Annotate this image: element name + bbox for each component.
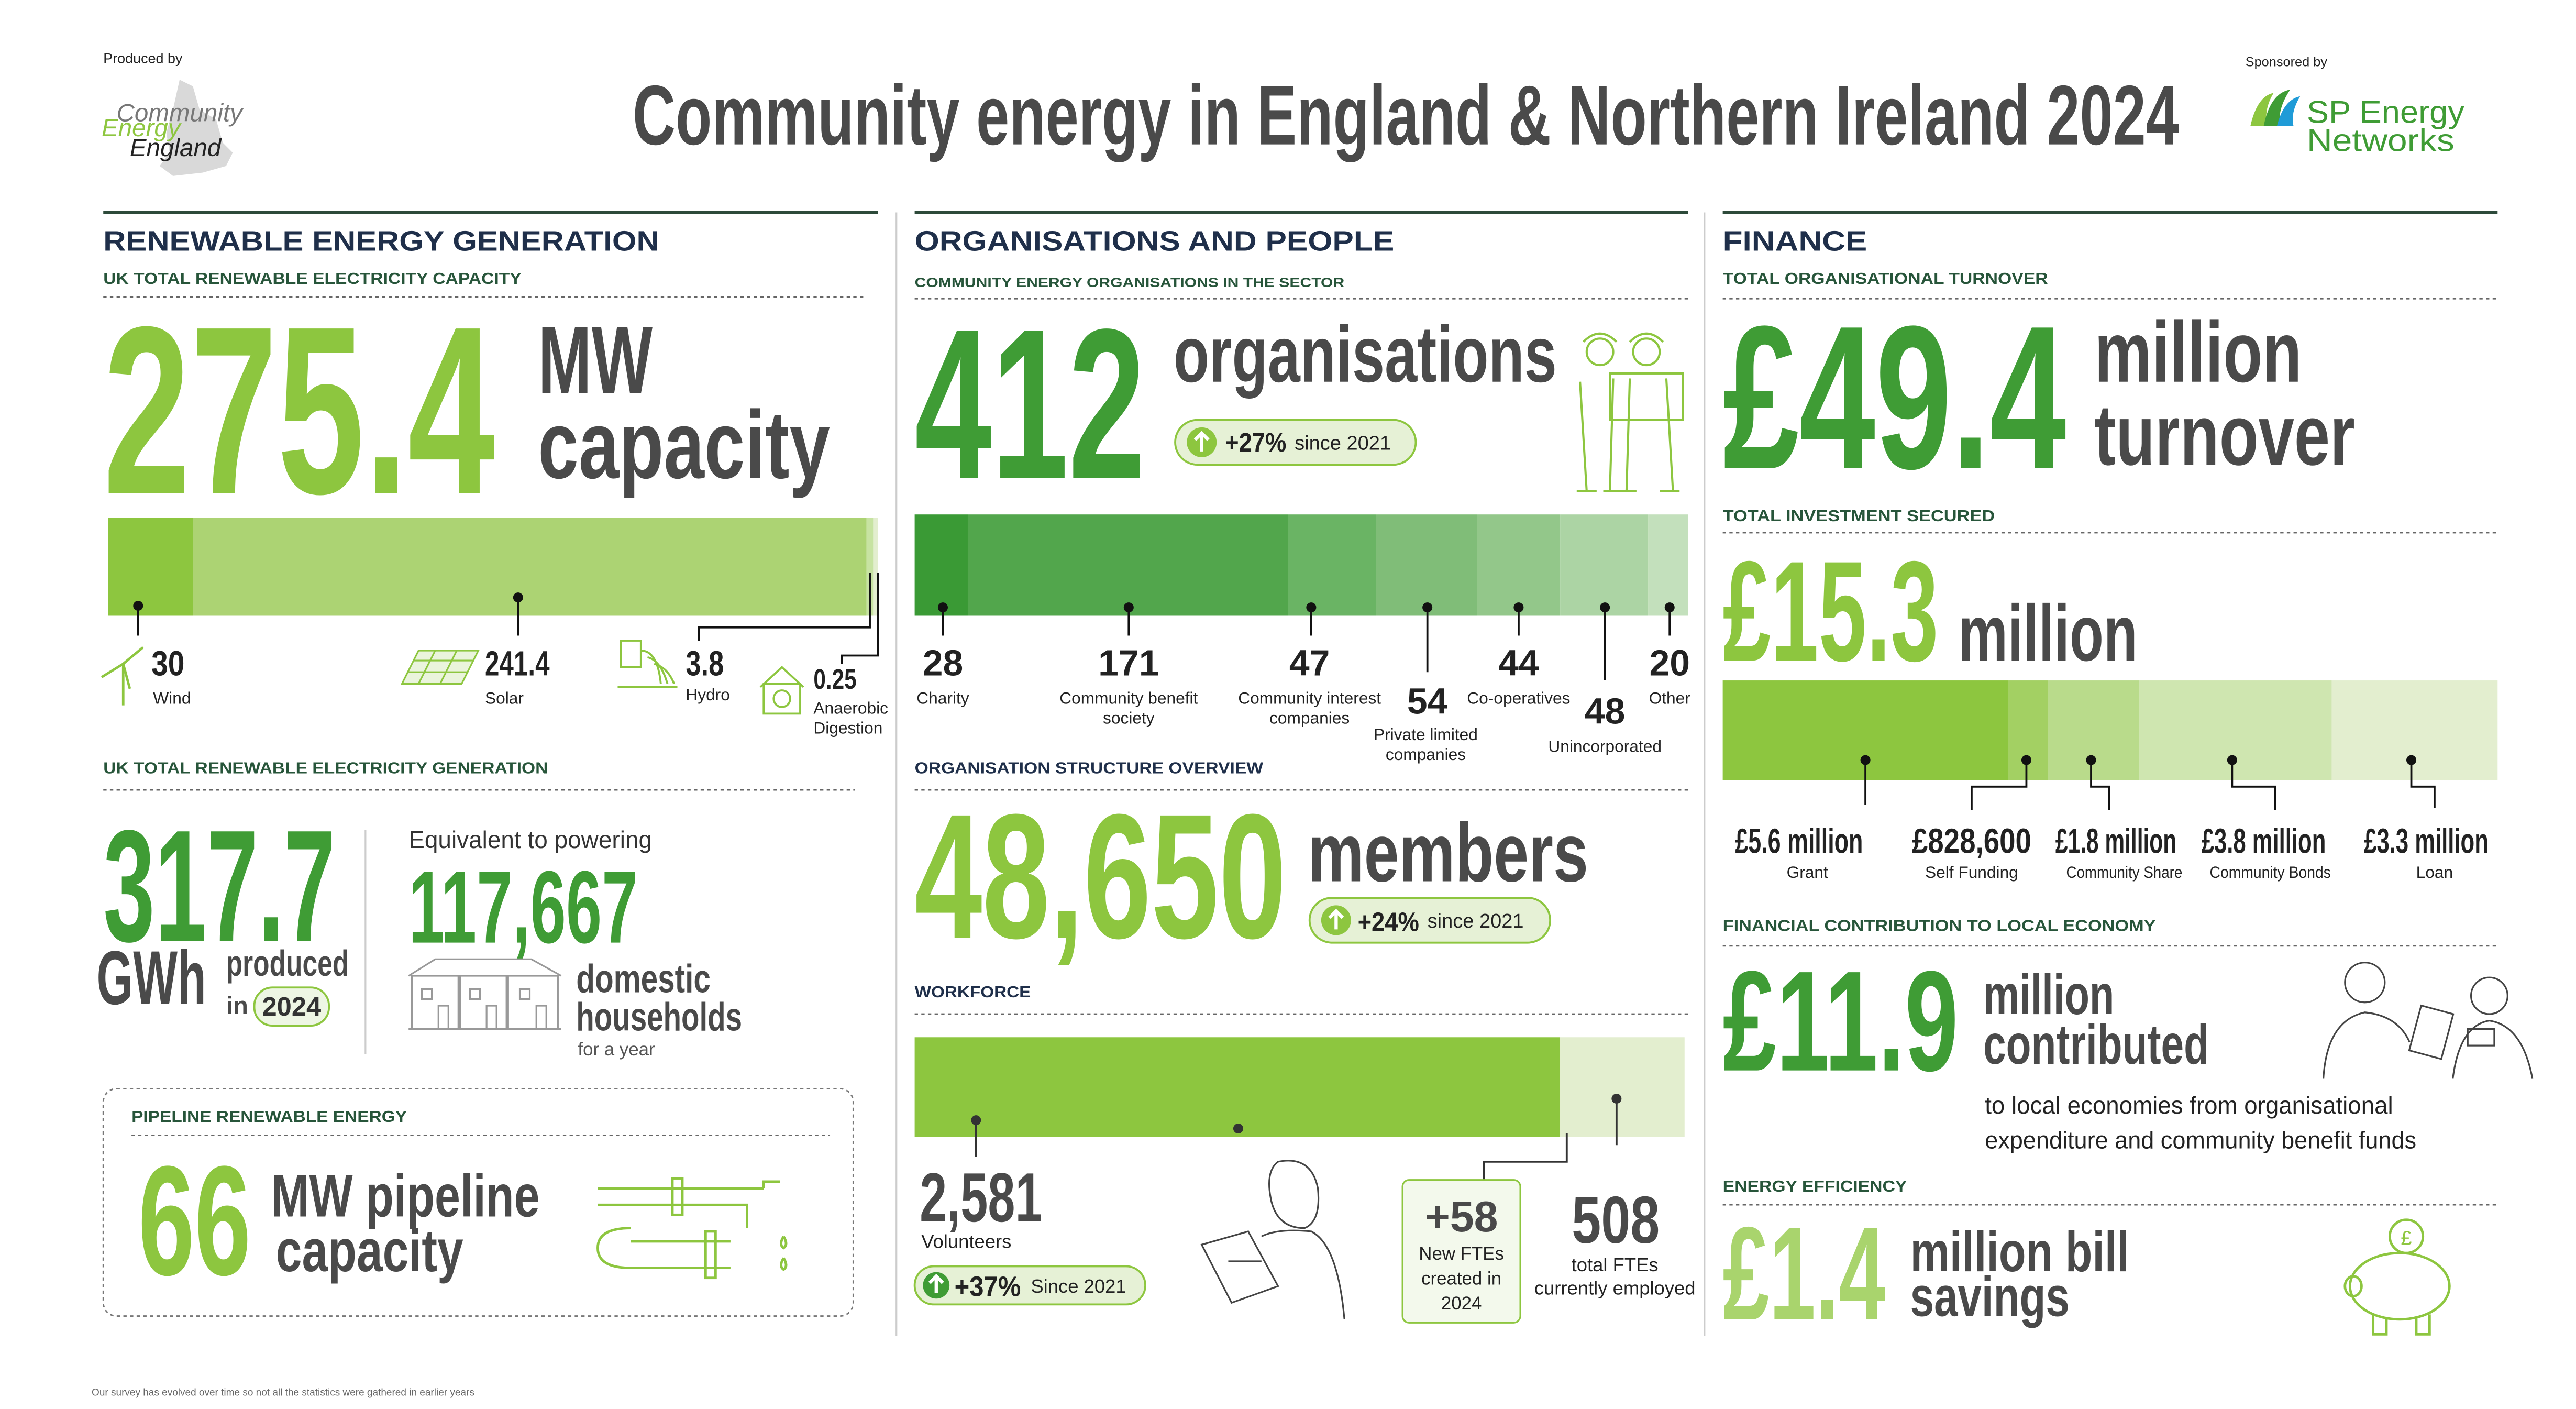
equivalent households (408, 826, 742, 1060)
produced by: Produced by (103, 50, 183, 66)
new FTEs box: New FTEs (1419, 1243, 1504, 1264)
org labels: 47 (1289, 643, 1330, 684)
subheading local economy: FINANCIAL CONTRIBUTION TO LOCAL ECONOMY (1723, 917, 2156, 934)
panel: organisations and people (915, 213, 1696, 1323)
icon: people with plan (1577, 334, 1683, 491)
panel: finance: TOTAL ORGANISATIONAL TURNOVER (1723, 270, 2048, 288)
equivalent households: 117,667 (408, 850, 637, 965)
panel: organisations and people: members (1308, 806, 1588, 899)
big number 317.7 GWh: produced (226, 943, 349, 984)
big number £49.4: £49.4 (1723, 283, 2067, 511)
org labels: Other (1649, 688, 1690, 707)
volunteers: 2,581 (920, 1159, 1043, 1237)
logo: Community Energy England: Energy (102, 114, 182, 142)
big number 317.7 GWh: GWh (97, 935, 206, 1020)
org labels: 28 (923, 643, 963, 684)
investment labels: Community Bonds (2210, 863, 2331, 882)
investment labels: Loan (2416, 863, 2453, 882)
capacity labels: 30 (151, 645, 184, 684)
org bar chart (915, 514, 1688, 680)
investment labels: Self Funding (1925, 863, 2018, 882)
capacity labels: 241.4 (485, 645, 550, 684)
new FTEs box: created in (1421, 1268, 1501, 1289)
logo: SP Energy Networks (2250, 90, 2464, 158)
capacity labels: Solar (485, 688, 524, 707)
icon: pipe and tap (598, 1179, 786, 1278)
panel: finance: million (2094, 304, 2302, 400)
new FTEs box: 2024 (1441, 1293, 1482, 1314)
volunteers (915, 1159, 1145, 1304)
MW capacity: capacity (538, 391, 830, 499)
org labels: 44 (1498, 643, 1539, 684)
panel: finance: savings (1910, 1265, 2070, 1328)
capacity labels: 0.25 (813, 664, 857, 695)
volunteers: Volunteers (921, 1231, 1011, 1252)
workforce bar (915, 1037, 1685, 1182)
icon: piggy bank (2345, 1220, 2449, 1334)
pill +24% (1310, 898, 1550, 943)
pill +27%: +27% (1225, 427, 1286, 457)
logo: SP Energy Networks: SP Energy (2307, 94, 2464, 129)
equivalent households: households (576, 995, 742, 1040)
panel: renewable energy generation (92, 213, 888, 1399)
logo: SP Energy Networks: Networks (2307, 123, 2455, 158)
panel: pipeline: capacity (276, 1218, 463, 1284)
big number 317.7 GWh: 2024 (262, 992, 321, 1021)
panel: finance: £11.9 (1723, 941, 1959, 1101)
capacity labels (151, 645, 888, 737)
capacity labels: 3.8 (686, 645, 724, 684)
equivalent households: for a year (578, 1039, 655, 1060)
panel: pipeline: 66 (138, 1133, 251, 1308)
icon: houses (408, 959, 561, 1029)
pill +27% (1175, 420, 1416, 465)
new FTEs box: +58 (1425, 1193, 1498, 1241)
icon: wind turbine (102, 647, 143, 706)
big number 317.7 GWh: 317.7 (103, 798, 336, 975)
investment bar chart (1723, 680, 2497, 810)
panel: finance: £15.3 (1723, 531, 1939, 691)
capacity labels: Digestion (813, 718, 882, 737)
org labels: Community interest (1238, 688, 1381, 707)
total FTEs: total FTEs (1572, 1254, 1659, 1275)
equivalent households: domestic (576, 957, 711, 1001)
panel: pipeline (103, 1088, 853, 1316)
big number 412: 412 (915, 284, 1145, 524)
subheading capacity: UK TOTAL RENEWABLE ELECTRICITY CAPACITY (103, 270, 522, 288)
org labels: Charity (916, 688, 969, 707)
subheading generation: UK TOTAL RENEWABLE ELECTRICITY GENERATION (103, 759, 548, 777)
panel: finance: million (1959, 589, 2138, 678)
subheading energy efficiency: ENERGY EFFICIENCY (1723, 1178, 1907, 1195)
heading: ORGANISATIONS AND PEOPLE (915, 225, 1394, 257)
investment labels: £5.6 million (1735, 822, 1863, 861)
total FTEs (1534, 1183, 1696, 1298)
pill +27%: since 2021 (1295, 433, 1391, 455)
big number members: 48,650 (915, 777, 1286, 975)
panel: finance: to local economies from organisational (1985, 1092, 2393, 1119)
panel: organisations and people: organisations (1174, 310, 1557, 399)
panel: finance: £1.4 (1723, 1199, 1885, 1348)
org labels: 54 (1407, 680, 1448, 721)
subheading structure: ORGANISATION STRUCTURE OVERVIEW (915, 759, 1264, 777)
heading: RENEWABLE ENERGY GENERATION (103, 225, 659, 257)
org labels: 20 (1649, 643, 1690, 684)
logo: Community Energy England (102, 80, 244, 176)
pill +24%: since 2021 (1428, 910, 1524, 932)
MW capacity: MW (538, 306, 653, 414)
org labels: 48 (1585, 690, 1625, 731)
org labels (916, 643, 1690, 764)
panel: finance: turnover (2094, 387, 2355, 483)
volunteers: Since 2021 (1031, 1275, 1126, 1297)
icon: solar panel (402, 651, 478, 684)
org labels: companies (1269, 708, 1350, 727)
org labels: Private limited (1374, 725, 1478, 744)
panel: finance: million (1983, 963, 2114, 1026)
panel: pipeline: MW pipeline (271, 1163, 540, 1229)
total FTEs: 508 (1572, 1183, 1660, 1257)
icon: hydro (617, 641, 678, 687)
investment labels: £1.8 million (2055, 822, 2176, 861)
org labels: society (1103, 708, 1155, 727)
capacity bar chart (108, 518, 878, 664)
heading: FINANCE (1723, 225, 1867, 257)
capacity labels: Anaerobic (813, 698, 888, 717)
investment labels: Grant (1787, 863, 1828, 882)
investment labels (1735, 822, 2489, 882)
org labels: Co-operatives (1467, 688, 1570, 707)
logo: Community Energy England: Community (117, 99, 244, 127)
column dividers (896, 213, 897, 1336)
icon: two people (2324, 963, 2533, 1078)
big number 317.7 GWh (97, 798, 349, 1026)
panel: pipeline: PIPELINE RENEWABLE ENERGY (131, 1108, 407, 1126)
investment labels: £3.8 million (2202, 822, 2326, 861)
org labels: companies (1386, 745, 1466, 764)
investment labels: £828,600 (1912, 822, 2031, 861)
investment labels: £3.3 million (2364, 822, 2489, 861)
subheading investment: TOTAL INVESTMENT SECURED (1723, 508, 1995, 525)
icon: anaerobic digestion (760, 667, 803, 713)
MW capacity (538, 306, 830, 499)
equivalent households: Equivalent to powering (408, 826, 652, 853)
capacity labels: Hydro (686, 685, 730, 704)
icon: woman with clipboard (1202, 1161, 1344, 1319)
big number 317.7 GWh: in (226, 992, 248, 1020)
new FTEs box (1402, 1180, 1520, 1323)
sponsored by: Sponsored by (2246, 55, 2327, 70)
panel: finance (1723, 213, 2533, 1348)
capacity labels: Wind (153, 688, 191, 707)
org labels: Unincorporated (1548, 736, 1662, 755)
subheading workforce: WORKFORCE (915, 984, 1031, 1001)
org labels: Community benefit (1059, 688, 1198, 707)
pill +24%: +24% (1358, 907, 1419, 937)
logo: Community Energy England: England (130, 134, 222, 162)
volunteers: +37% (955, 1271, 1021, 1303)
footnote: Our survey has evolved over time so not all the statistics were gathered in earlier years (92, 1388, 474, 1399)
big number 275.4: 275.4 (103, 277, 496, 544)
panel: finance: contributed (1983, 1012, 2209, 1076)
investment labels: Community Share (2066, 863, 2182, 882)
org labels: 171 (1098, 643, 1159, 684)
total FTEs: currently employed (1534, 1277, 1696, 1298)
panel: finance: expenditure and community benefit funds (1985, 1127, 2416, 1154)
panel: organisations and people: COMMUNITY ENERGY ORGANISATIONS IN THE SECTOR (915, 276, 1344, 290)
icon: piggy bank: £ (2401, 1227, 2412, 1249)
panel: finance: million bill (1910, 1220, 2129, 1283)
